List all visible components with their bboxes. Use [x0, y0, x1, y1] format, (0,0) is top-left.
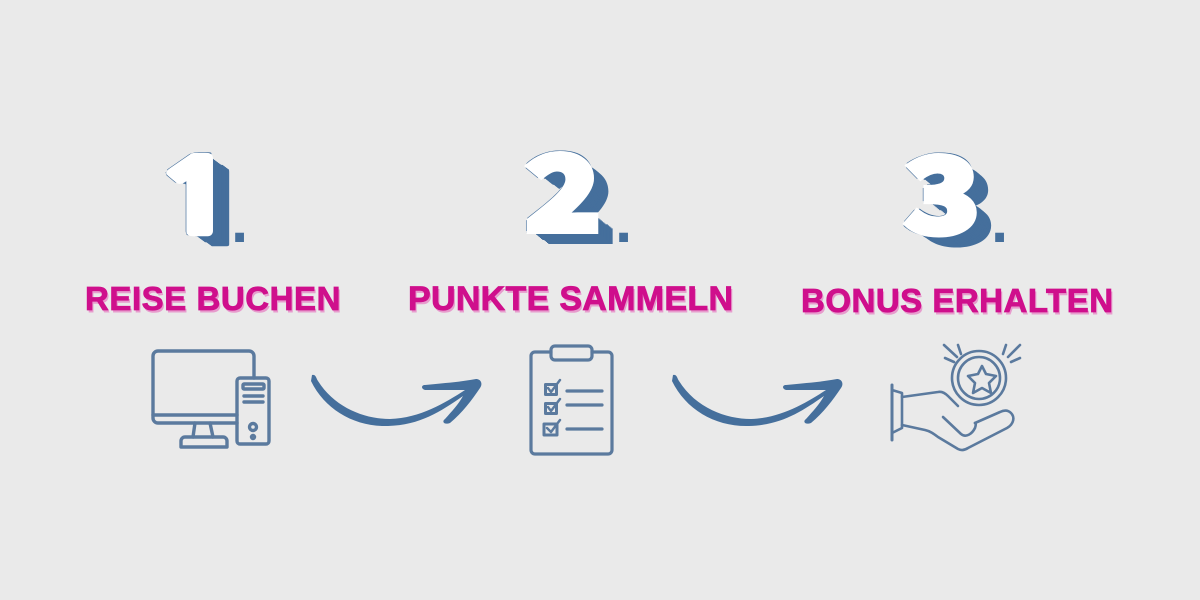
icon: hand with star coin — [892, 345, 1020, 450]
heading: step 1: REISE BUCHEN — [85, 280, 341, 317]
period 2: . — [615, 187, 632, 256]
number 2: 2 — [525, 110, 601, 261]
heading: step 2: PUNKTE SAMMELN — [408, 280, 733, 318]
arrow: step 2 to step 3 — [672, 375, 842, 426]
heading: step 3: BONUS ERHALTEN — [801, 282, 1114, 319]
number 1: 1 — [156, 148, 238, 248]
icon: computer — [153, 351, 269, 447]
number 3: 3 — [904, 112, 980, 263]
icon: clipboard checklist — [531, 346, 612, 454]
period 3: . — [991, 187, 1008, 256]
period 1: . — [231, 187, 248, 256]
arrow: step 1 to step 2 — [311, 375, 481, 426]
